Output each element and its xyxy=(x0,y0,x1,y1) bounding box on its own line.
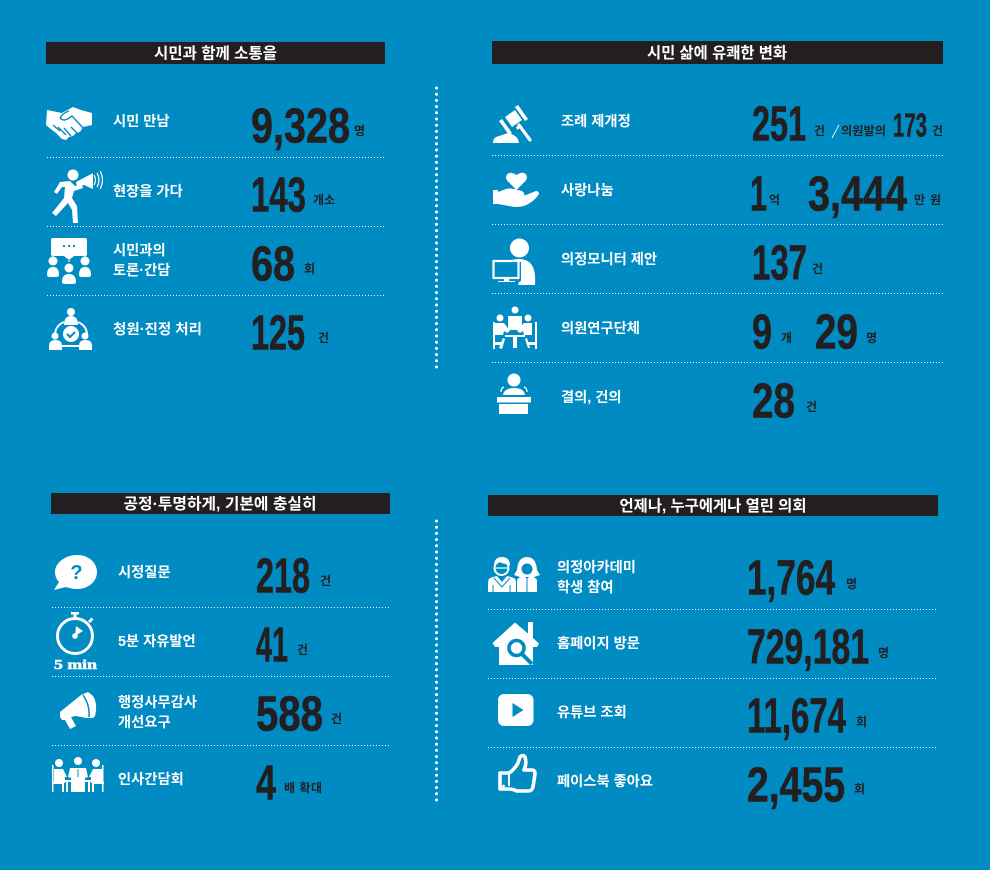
icon: 5 minute stopwatch: 5 min xyxy=(54,658,97,673)
value: 251 건 / 의원발의 173 건: 173 xyxy=(893,107,927,144)
label: 시민과의 토론·간담: 시민과의 xyxy=(113,242,166,259)
value: 1,764 명: 1,764 xyxy=(747,552,835,606)
value: 9개 29명 xyxy=(752,306,877,360)
label: 행정사무감사 개선요구 xyxy=(118,694,197,731)
panel: 공정·투명하게, 기본에 충실히 xyxy=(51,493,390,811)
value: 9개 29명: 개 xyxy=(781,331,792,345)
value: 2,455 회: 2,455 xyxy=(747,759,845,813)
value: 41 건: 건 xyxy=(297,643,308,657)
value: 125 건: 건 xyxy=(318,331,329,345)
icon: petition handling xyxy=(49,308,92,350)
value: 588 건: 588 xyxy=(256,688,323,742)
icon: research group xyxy=(493,306,537,349)
heading: 공정·투명하게, 기본에 충실히: 공정·투명하게, 기본에 충실히 xyxy=(124,495,316,513)
value: 2,455 회: 회 xyxy=(854,782,865,796)
value: 4 배 확대: 4 xyxy=(256,757,276,811)
value: 11,674 회: 회 xyxy=(856,715,867,729)
icon: speaker at podium xyxy=(497,374,531,414)
icon: meeting people xyxy=(52,757,104,792)
value: 28 건: 건 xyxy=(806,400,817,414)
label: 유튜브 조회: 유튜브 조회 xyxy=(557,704,627,721)
value: 9,328 명: 명 xyxy=(354,124,365,138)
value: 28 건: 28 xyxy=(752,375,795,429)
icon: gavel xyxy=(493,105,530,143)
label: 조례 제개정: 조례 제개정 xyxy=(561,113,631,130)
value: 9개 29명: 명 xyxy=(866,331,877,345)
icon: hand with heart xyxy=(493,173,539,207)
divider: bottom dotted line xyxy=(435,521,438,801)
heading: 언제나, 누구에게나 열린 의회 xyxy=(488,495,938,516)
value: 1억 3,444만 원: 1 xyxy=(750,168,767,222)
label: 의정아카데미 학생 참여: 의정아카데미 xyxy=(557,559,636,576)
heading: 시민 삶에 유쾌한 변화 xyxy=(492,41,943,64)
heading: 공정·투명하게, 기본에 충실히 xyxy=(51,493,390,514)
value: 11,674 회: 11,674 xyxy=(747,690,846,744)
value: 588 건: 건 xyxy=(331,712,342,726)
icon: house with magnifier xyxy=(492,622,539,665)
icon: runner with megaphone xyxy=(52,170,102,223)
label: 의원연구단체: 의원연구단체 xyxy=(561,320,640,337)
icon: person at monitor xyxy=(494,238,535,285)
panel: 언제나, 누구에게나 열린 의회 xyxy=(488,495,938,813)
value: 729,181 명: 729,181 xyxy=(747,621,869,675)
label: 의정아카데미 학생 참여 xyxy=(557,559,636,596)
label: 의정아카데미 학생 참여: 학생 참여 xyxy=(557,579,614,596)
value: 9개 29명: 29 xyxy=(815,306,858,360)
label: 시정질문: 시정질문 xyxy=(118,564,171,581)
value: 137 건: 137 xyxy=(752,237,807,291)
icon: thumbs up xyxy=(500,756,535,791)
icon: megaphone xyxy=(60,692,96,729)
label: 시민 만남: 시민 만남 xyxy=(113,113,170,130)
value: 251 건 / 의원발의 173 건 xyxy=(752,98,943,152)
value: 218 건: 218 xyxy=(256,550,310,604)
icon: academy students xyxy=(488,557,540,592)
value: 41 건: 41 xyxy=(256,619,288,673)
label: 의정모니터 제안: 의정모니터 제안 xyxy=(561,251,657,268)
icon: handshake xyxy=(46,107,92,140)
value: 1,764 명: 명 xyxy=(846,577,857,591)
value: 1억 3,444만 원 xyxy=(750,168,941,222)
value: 143 개소: 143 xyxy=(251,169,306,223)
label: 행정사무감사 개선요구: 개선요구 xyxy=(118,714,171,731)
label: 인사간담회: 인사간담회 xyxy=(118,771,184,788)
label: 행정사무감사 개선요구: 행정사무감사 xyxy=(118,694,197,711)
value: 9개 29명: 9 xyxy=(752,306,772,360)
label: 페이스북 좋아요: 페이스북 좋아요 xyxy=(557,773,653,790)
value: 729,181 명: 명 xyxy=(878,646,889,660)
label: 홈페이지 방문: 홈페이지 방문 xyxy=(557,635,640,652)
icon: question speech bubble xyxy=(54,555,97,590)
value: 125 건: 125 xyxy=(251,307,305,361)
heading: 시민 삶에 유쾌한 변화: 시민 삶에 유쾌한 변화 xyxy=(647,44,787,62)
icon: question speech bubble: ? xyxy=(70,562,83,584)
value: 1억 3,444만 원: 3,444 xyxy=(808,168,907,222)
label: 결의, 건의: 결의, 건의 xyxy=(561,389,622,406)
value: 218 건: 건 xyxy=(320,574,331,588)
value: 68 회: 회 xyxy=(304,262,315,276)
heading: 시민과 함께 소통을 xyxy=(46,42,385,64)
label: 청원·진정 처리: 청원·진정 처리 xyxy=(113,321,202,338)
value: 137 건: 건 xyxy=(812,262,823,276)
heading: 시민과 함께 소통을: 시민과 함께 소통을 xyxy=(154,44,277,62)
value: 251 건 / 의원발의 173 건: 건 xyxy=(932,124,943,138)
value: 251 건 / 의원발의 173 건: 건 xyxy=(814,124,825,138)
label: 시민과의 토론·간담 xyxy=(113,242,170,279)
label: 사랑나눔: 사랑나눔 xyxy=(561,182,614,199)
label: 시민과의 토론·간담: 토론·간담 xyxy=(113,262,170,279)
value: 68 회: 68 xyxy=(251,238,295,292)
icon: 5 minute stopwatch xyxy=(54,612,97,673)
value: 1억 3,444만 원: 억 xyxy=(769,193,780,207)
value: 1억 3,444만 원: 만 원 xyxy=(914,193,941,207)
divider: top dotted line xyxy=(435,88,438,368)
value: 143 개소: 개소 xyxy=(313,193,335,207)
label: 현장을 가다: 현장을 가다 xyxy=(113,183,183,200)
value: 9,328 명: 9,328 xyxy=(251,100,350,154)
value: 251 건 / 의원발의 173 건: 251 xyxy=(752,98,806,152)
icon: discussion group xyxy=(47,238,91,284)
panel: 시민과 함께 소통을 xyxy=(46,42,385,361)
value: 4 배 확대: 배 확대 xyxy=(284,780,322,795)
panel: 시민 삶에 유쾌한 변화 xyxy=(492,41,943,429)
icon: youtube play button xyxy=(498,694,534,726)
value: 4 배 확대 xyxy=(256,757,322,811)
heading: 언제나, 누구에게나 열린 의회: 언제나, 누구에게나 열린 의회 xyxy=(620,497,806,515)
value: 251 건 / 의원발의 173 건: 의원발의 xyxy=(841,124,886,138)
label: 5분 자유발언: 5분 자유발언 xyxy=(118,633,196,650)
